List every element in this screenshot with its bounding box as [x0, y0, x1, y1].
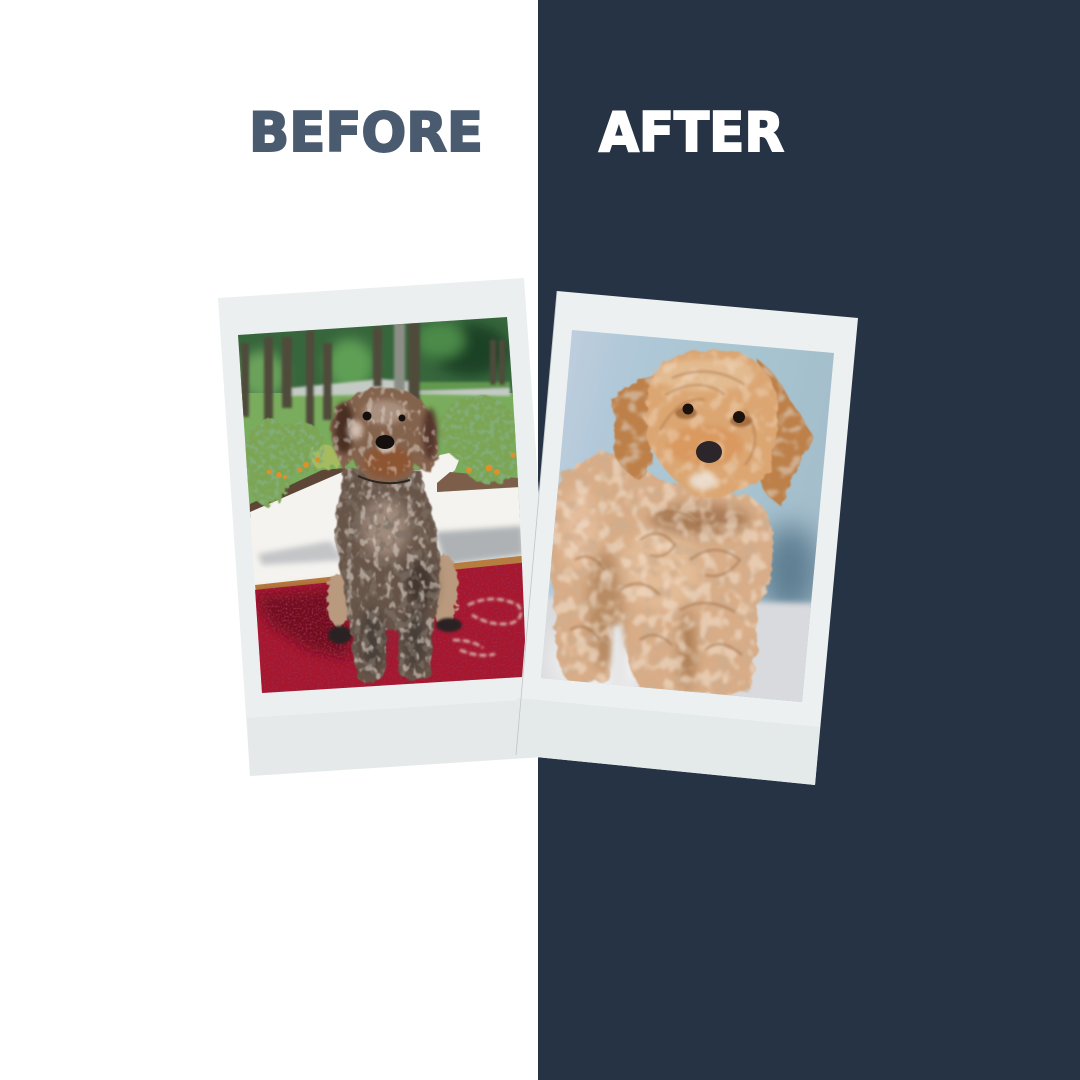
face curls	[660, 371, 755, 465]
muddy dog	[327, 387, 462, 682]
polaroid: before	[218, 278, 557, 776]
polaroid: after	[516, 291, 858, 785]
background: white half	[0, 0, 538, 1080]
photo: muddy dog in garden	[238, 317, 525, 693]
dog eyes and nose	[675, 404, 752, 463]
fur curls	[570, 512, 742, 655]
background: navy half	[538, 0, 1080, 1080]
dog eyes and nose	[362, 412, 406, 453]
photo: clean fluffy dog	[541, 330, 834, 702]
fluffy dog	[551, 349, 814, 695]
leafy bushes	[244, 395, 517, 506]
before and after infographic	[218, 0, 1080, 1080]
heading: BEFORE: BEFORE	[249, 101, 483, 164]
heading: AFTER: AFTER	[599, 101, 784, 164]
